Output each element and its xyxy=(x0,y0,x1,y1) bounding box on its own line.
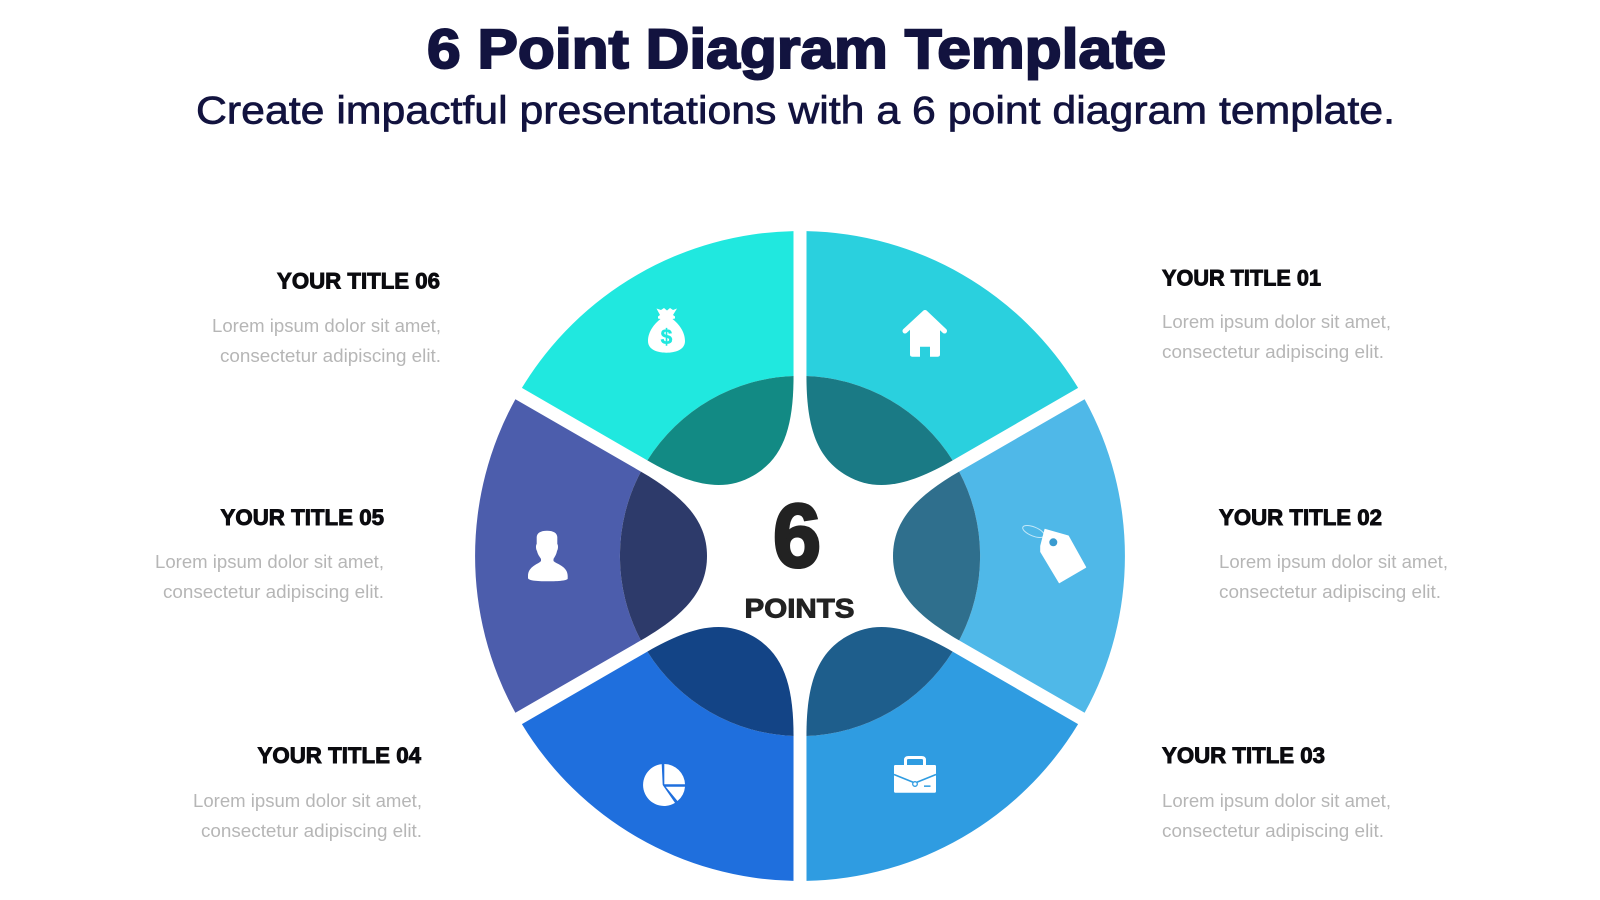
label: title 03: Lorem ipsum dolor sit amet, xyxy=(1162,790,1391,811)
icon: money bag xyxy=(648,308,685,353)
label: title 04: consectetur adipiscing elit. xyxy=(201,820,422,841)
label: title 04: YOUR TITLE 04 xyxy=(258,743,422,768)
segment 01 xyxy=(711,196,1098,554)
icon: person xyxy=(528,531,568,581)
label: title 04: Lorem ipsum dolor sit amet, xyxy=(193,790,422,811)
label: title 06: Lorem ipsum dolor sit amet, xyxy=(212,315,441,336)
label: title 06: YOUR TITLE 06 xyxy=(277,268,440,294)
label: title 05: consectetur adipiscing elit. xyxy=(163,581,384,602)
label: title 02: YOUR TITLE 02 xyxy=(1219,505,1382,530)
label: title 05: YOUR TITLE 05 xyxy=(220,505,384,530)
label: title 03: YOUR TITLE 03 xyxy=(1162,743,1325,768)
label: title 05 xyxy=(155,505,384,602)
label: title 06: consectetur adipiscing elit. xyxy=(220,345,441,366)
segment 06 xyxy=(502,196,889,554)
label: title 03 xyxy=(1162,743,1391,841)
center number: 6 xyxy=(773,486,821,586)
subtitle: Create impactful presentations with a 6 point diagram template. xyxy=(196,90,1395,132)
icon: money bag: $ xyxy=(661,326,673,349)
segment 04 xyxy=(502,558,889,900)
label: title 01: consectetur adipiscing elit. xyxy=(1162,341,1384,362)
center label: POINTS xyxy=(744,594,854,624)
label: title 01: Lorem ipsum dolor sit amet, xyxy=(1162,311,1391,332)
label: title 02 xyxy=(1219,505,1448,602)
label: title 02: Lorem ipsum dolor sit amet, xyxy=(1219,551,1448,572)
title: 6 Point Diagram Template xyxy=(427,17,1166,80)
label: title 04 xyxy=(193,743,422,841)
icon: briefcase xyxy=(894,758,936,793)
icon: price tag xyxy=(1021,523,1086,583)
circular diagram xyxy=(475,196,1125,900)
label: title 03: consectetur adipiscing elit. xyxy=(1162,820,1384,841)
segment 02 xyxy=(893,399,1125,713)
icon: pie chart xyxy=(643,764,685,806)
label: title 01 xyxy=(1162,266,1391,362)
label: title 05: Lorem ipsum dolor sit amet, xyxy=(155,551,384,572)
icon: house xyxy=(905,312,944,357)
label: title 01: YOUR TITLE 01 xyxy=(1162,266,1321,290)
label: title 02: consectetur adipiscing elit. xyxy=(1219,581,1441,602)
label: title 06 xyxy=(212,268,441,366)
segment 05 xyxy=(475,399,707,713)
segment 03 xyxy=(711,558,1098,900)
